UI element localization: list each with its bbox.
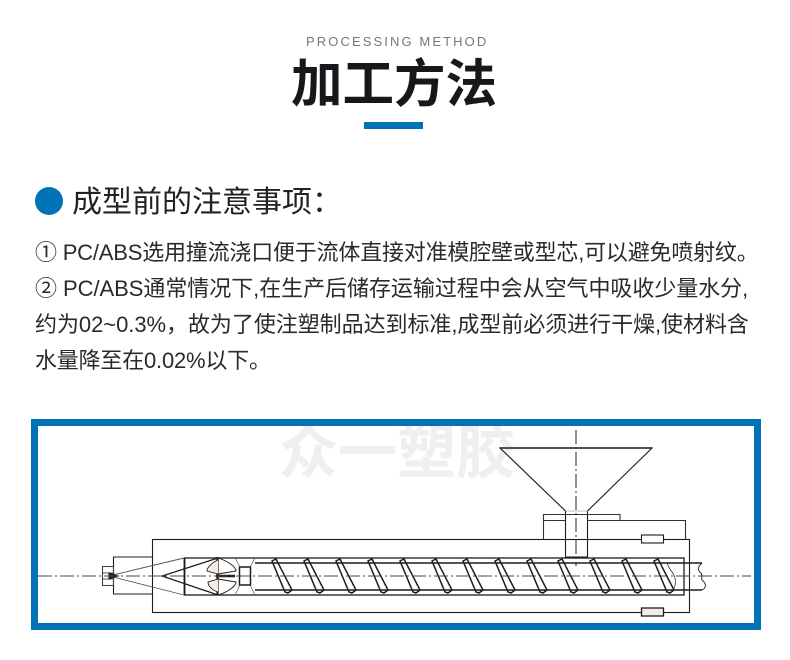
check ring xyxy=(235,558,255,595)
screw shaft xyxy=(255,563,705,590)
feed block xyxy=(544,514,686,539)
section bullet icon xyxy=(35,187,63,215)
note 1: ① PC/ABS选用撞流浇口便于流体直接对准模腔壁或型芯,可以避免喷射纹。 xyxy=(35,240,759,265)
hopper xyxy=(500,448,652,557)
title accent bar xyxy=(364,122,423,129)
panel: injection screw diagram xyxy=(31,419,761,630)
note 2 line 2: 约为02~0.3%，故为了使注塑制品达到标准,成型前必须进行干燥,使材料含 xyxy=(35,312,749,337)
text block: notes xyxy=(35,240,759,373)
nozzle xyxy=(102,557,184,595)
barrel xyxy=(152,540,690,612)
diagram xyxy=(38,430,751,617)
screw tip xyxy=(162,557,236,595)
section heading: 成型前的注意事项： xyxy=(72,186,342,219)
note 2 line 1: ② PC/ABS通常情况下,在生产后储存运输过程中会从空气中吸收少量水分, xyxy=(35,276,748,301)
center axis vertical xyxy=(575,430,577,566)
lower clamp slot xyxy=(642,608,664,616)
title: 加工方法 xyxy=(291,55,497,113)
center axis horizontal xyxy=(38,575,751,577)
note 2 line 3: 水量降至在0.02%以下。 xyxy=(35,348,271,373)
subtitle: processing method: PROCESSING METHOD xyxy=(306,34,488,49)
frame border xyxy=(31,419,761,630)
watermark: 众一塑胶 xyxy=(279,420,515,486)
upper clamp slot xyxy=(642,535,664,543)
screw flights xyxy=(272,559,675,593)
